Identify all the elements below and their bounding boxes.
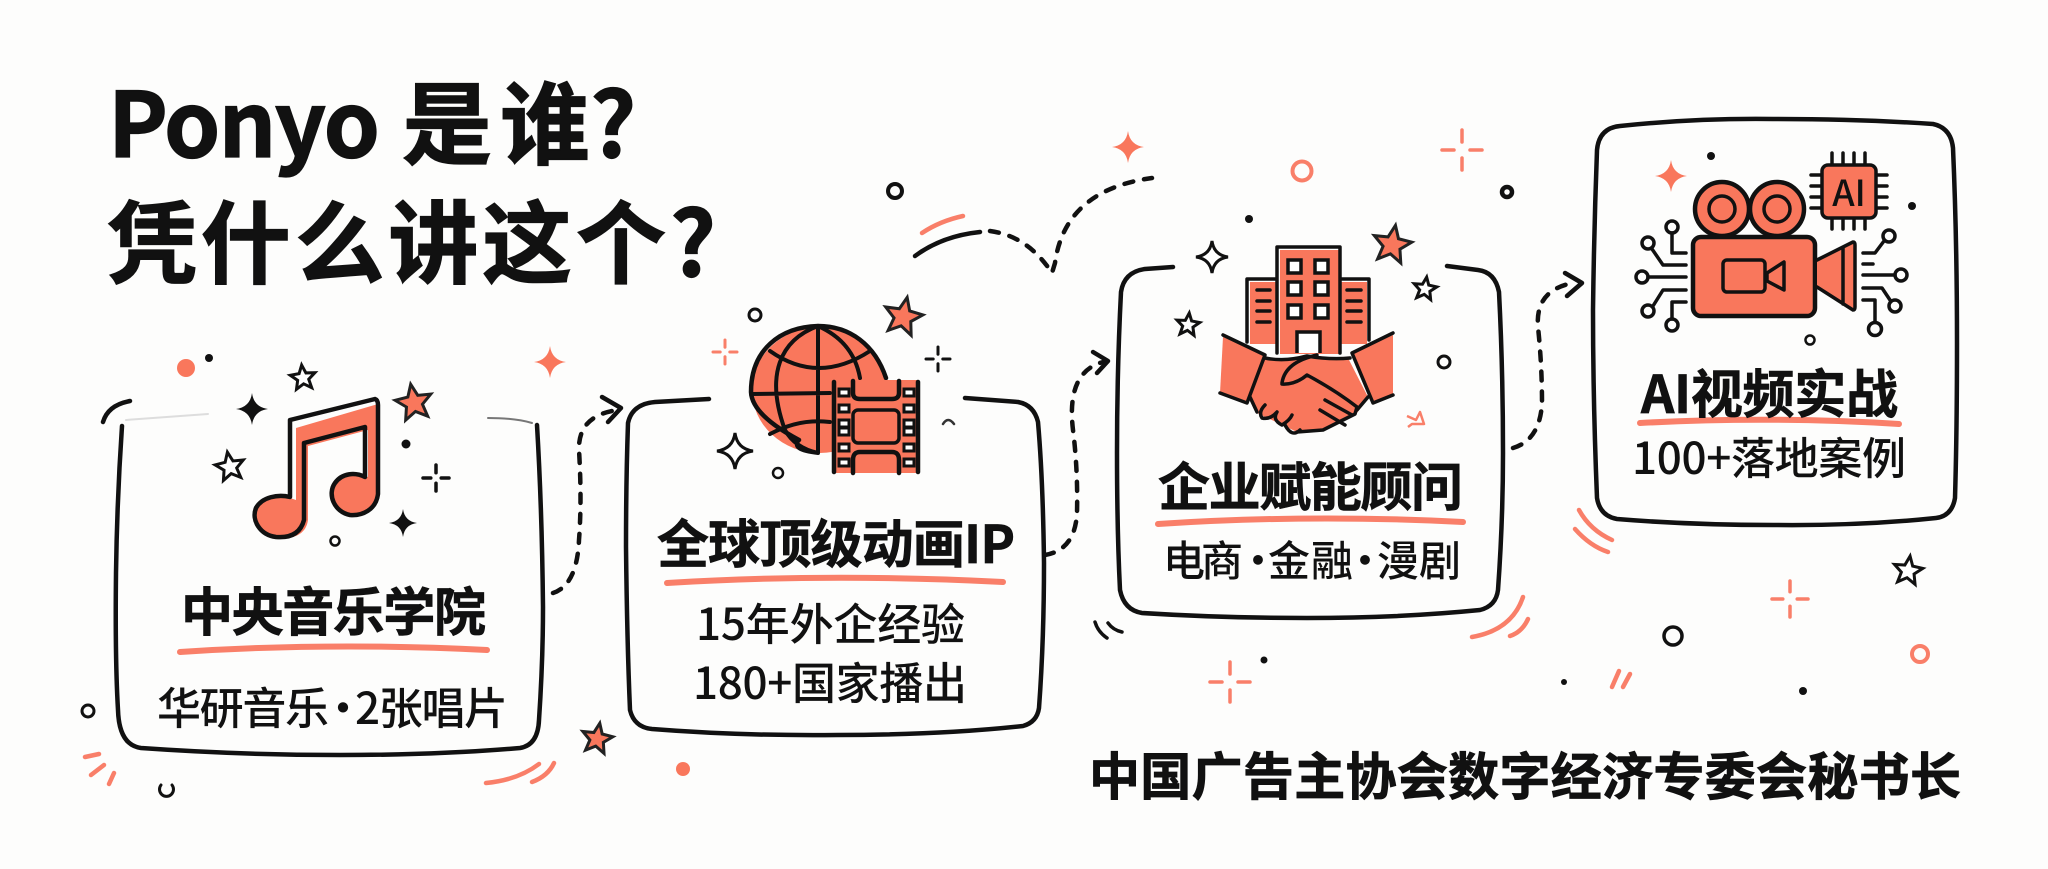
icon: outlined sparkle	[1196, 241, 1228, 273]
arrow: panel 3 to panel 4	[1513, 273, 1582, 448]
heading: 企业赋能顾问	[1158, 446, 1463, 521]
subtitle: ·	[321, 673, 365, 737]
decoration: lower right	[1210, 510, 1928, 702]
icon: AI chip: AI	[1832, 165, 1866, 217]
panel frame	[103, 401, 543, 755]
decoration: around first panel	[82, 346, 690, 796]
icon: lower sparkle	[389, 509, 417, 537]
panel: 全球顶级动画IP	[626, 293, 1044, 735]
subtitle: 漫剧	[1377, 528, 1461, 589]
subtitle lines	[693, 589, 967, 712]
subtitle lines: 15年外企经验	[696, 589, 965, 653]
icon: small ring	[773, 468, 783, 478]
subtitle: 100+落地案例	[1632, 423, 1906, 487]
footer credential line: 中国广告主协会数字经济专委会秘书长	[1089, 736, 1961, 810]
title: 是谁	[402, 53, 590, 183]
icon: globe and film	[751, 326, 918, 473]
icon: coral sparkle	[1655, 160, 1687, 192]
icon: top ring	[749, 309, 761, 321]
icon: coral plus	[713, 340, 737, 364]
icon: outlined star	[289, 364, 316, 390]
subtitle: 金融	[1268, 528, 1353, 589]
subtitle: 电商	[1163, 528, 1243, 589]
icon: small ring	[330, 536, 340, 546]
panel: AI视频实战	[1593, 119, 1957, 525]
panel: 中央音乐学院	[103, 364, 543, 755]
icon: black dot	[402, 440, 410, 448]
icon: dashed plus	[423, 465, 449, 491]
icon: black sparkle	[236, 393, 268, 425]
arrow: panel 1 to panel 2	[553, 397, 621, 593]
icon: left circuits	[1636, 221, 1686, 331]
subtitle: 华研音乐	[157, 673, 329, 737]
heading: AI视频实战	[1640, 353, 1898, 428]
title: 凭什么讲这个?	[107, 172, 716, 302]
panel frame	[626, 398, 1044, 735]
subtitle: ·	[1344, 528, 1386, 589]
icon: coral scribble	[1407, 412, 1424, 427]
subtitle: ·	[1237, 528, 1279, 589]
arrow: panel 2 to panel 3	[1045, 352, 1108, 555]
underline	[667, 578, 1003, 583]
title: Ponyo	[108, 53, 380, 183]
icon: building with handshake	[1220, 247, 1393, 433]
icon: small ring	[1438, 356, 1450, 368]
icon: small ring	[1806, 336, 1814, 344]
panel frame	[1117, 266, 1503, 618]
icon: outlined sparkle	[717, 433, 753, 469]
underline	[180, 646, 487, 652]
icon: top dot	[1707, 152, 1715, 160]
icon: coral star	[881, 293, 926, 337]
icon: small arc	[943, 420, 954, 424]
icon: black dot	[1245, 215, 1253, 223]
decoration: around third panel	[1095, 130, 1528, 638]
icon: right circuits	[1863, 230, 1907, 336]
panel: 企业赋能顾问	[1117, 215, 1503, 618]
connector: dashed swoop above panel 3	[888, 178, 1152, 273]
icon: music note	[255, 399, 378, 538]
icon: right dot	[1908, 202, 1916, 210]
underline	[1640, 420, 1899, 424]
icon: outlined star right	[1412, 276, 1438, 300]
underline	[1158, 518, 1463, 524]
icon: AI chip	[1811, 153, 1887, 229]
subtitle lines: 180+国家播出	[693, 648, 967, 712]
icon: black plus	[926, 347, 950, 371]
heading: 中央音乐学院	[181, 571, 486, 646]
icon: coral star	[1370, 222, 1414, 264]
icon: outlined star left	[1176, 312, 1201, 336]
icon: outlined star left	[213, 450, 246, 481]
icon: film camera	[1693, 182, 1855, 316]
title	[107, 53, 716, 302]
icon: coral star	[393, 381, 434, 421]
panel frame	[1593, 119, 1957, 525]
heading: 全球顶级动画IP	[657, 503, 1015, 578]
title: ?	[590, 53, 636, 183]
subtitle: 2张唱片	[355, 673, 508, 737]
